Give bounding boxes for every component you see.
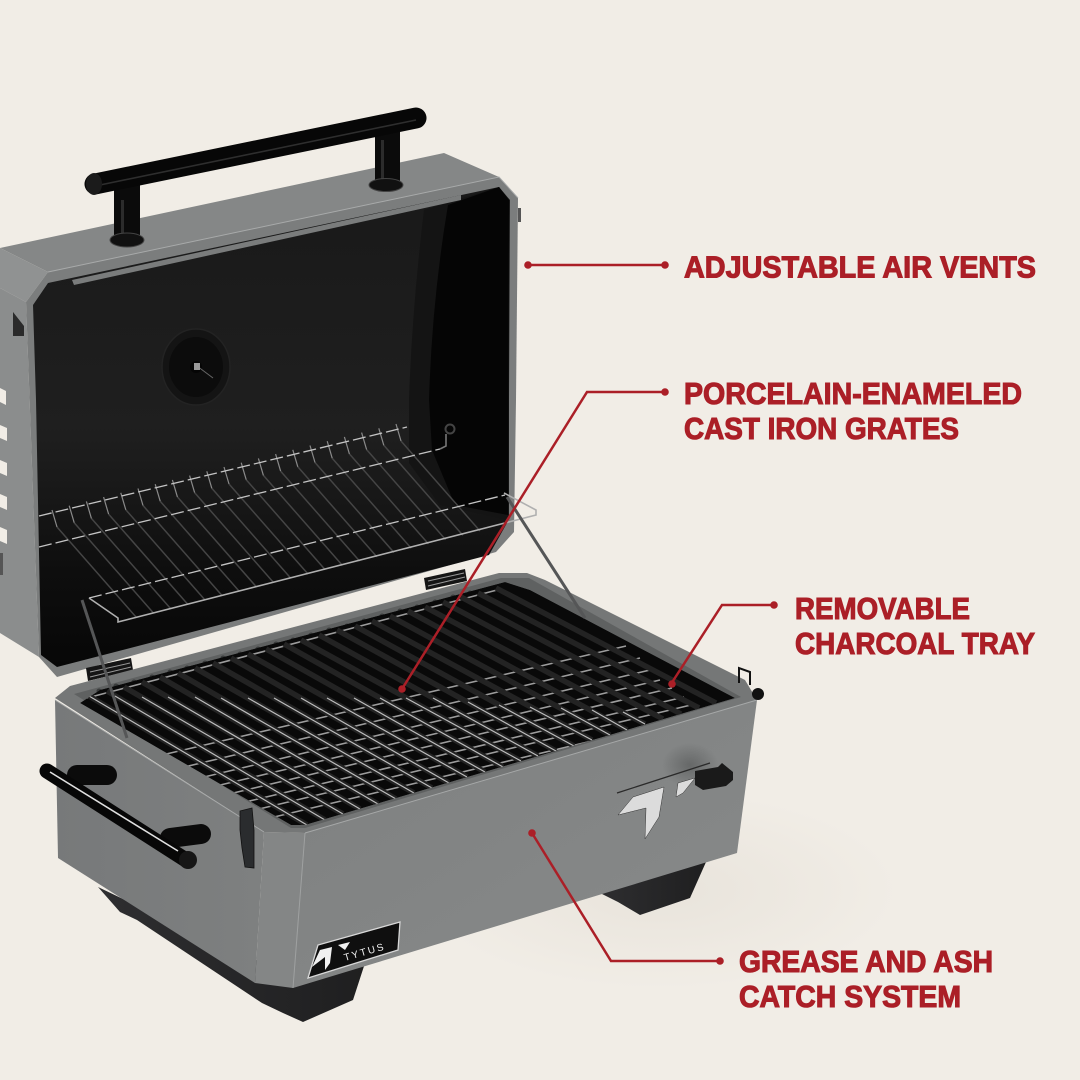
latch shadow	[662, 743, 718, 787]
callout: removable charcoal tray: CHARCOAL TRAY	[795, 626, 1035, 661]
lip highlight	[48, 177, 518, 272]
lid inner lip	[26, 177, 518, 677]
grill feet	[98, 862, 706, 1022]
rack rods	[39, 427, 505, 598]
left handle	[47, 771, 201, 869]
lid	[0, 118, 536, 677]
lid top inner strip	[72, 195, 461, 285]
side vent slots	[0, 388, 7, 544]
rack ticks	[52, 424, 401, 527]
callout: adjustable air vents: ADJUSTABLE AIR VENTS	[684, 250, 1036, 284]
callout: porcelain-enameled cast iron grates: PORCELAIN-ENAMELED	[684, 376, 1022, 411]
logo: badge	[308, 922, 400, 978]
base rim	[55, 573, 757, 833]
callout: removable charcoal tray	[668, 591, 1035, 688]
logo: front panel emblem	[618, 778, 695, 839]
interior right shadow	[409, 187, 509, 520]
callout: removable charcoal tray: REMOVABLE	[795, 591, 970, 626]
base corner facet	[255, 832, 305, 988]
inner wall	[74, 578, 741, 828]
grate bright wires	[89, 696, 645, 825]
front latch	[617, 763, 733, 793]
lid prop rods	[82, 497, 585, 738]
lid top face	[0, 153, 499, 272]
upper warming rack	[39, 424, 536, 622]
callout: grease and ash catch system: GREASE AND ASH	[739, 944, 993, 979]
logo: badge: TYTUS	[343, 942, 387, 964]
lid hinges	[86, 569, 467, 681]
base left panel	[55, 700, 264, 983]
wall teeth	[99, 593, 478, 696]
callout: grease and ash catch system: CATCH SYSTEM	[739, 979, 961, 1014]
grill base	[47, 573, 764, 988]
rack wires	[57, 441, 480, 617]
callout: porcelain-enameled cast iron grates	[398, 376, 1022, 693]
lid left corner facet	[0, 248, 48, 302]
right side handle and knob	[739, 668, 764, 700]
grate dark bars	[89, 588, 716, 825]
icon: lid vent	[162, 329, 230, 405]
callout: grease and ash catch system	[528, 829, 993, 1014]
lid interior	[33, 187, 510, 667]
callout: adjustable air vents	[524, 250, 1036, 284]
grate cross rods	[87, 590, 705, 818]
lid side latch	[13, 312, 24, 336]
front-left latch	[240, 808, 254, 868]
lid handle	[86, 118, 416, 247]
callout: porcelain-enameled cast iron grates: CAST IRON GRATES	[684, 411, 959, 446]
cooking grate	[80, 582, 735, 825]
base front panel	[293, 700, 757, 988]
lid left side panel	[0, 288, 39, 657]
